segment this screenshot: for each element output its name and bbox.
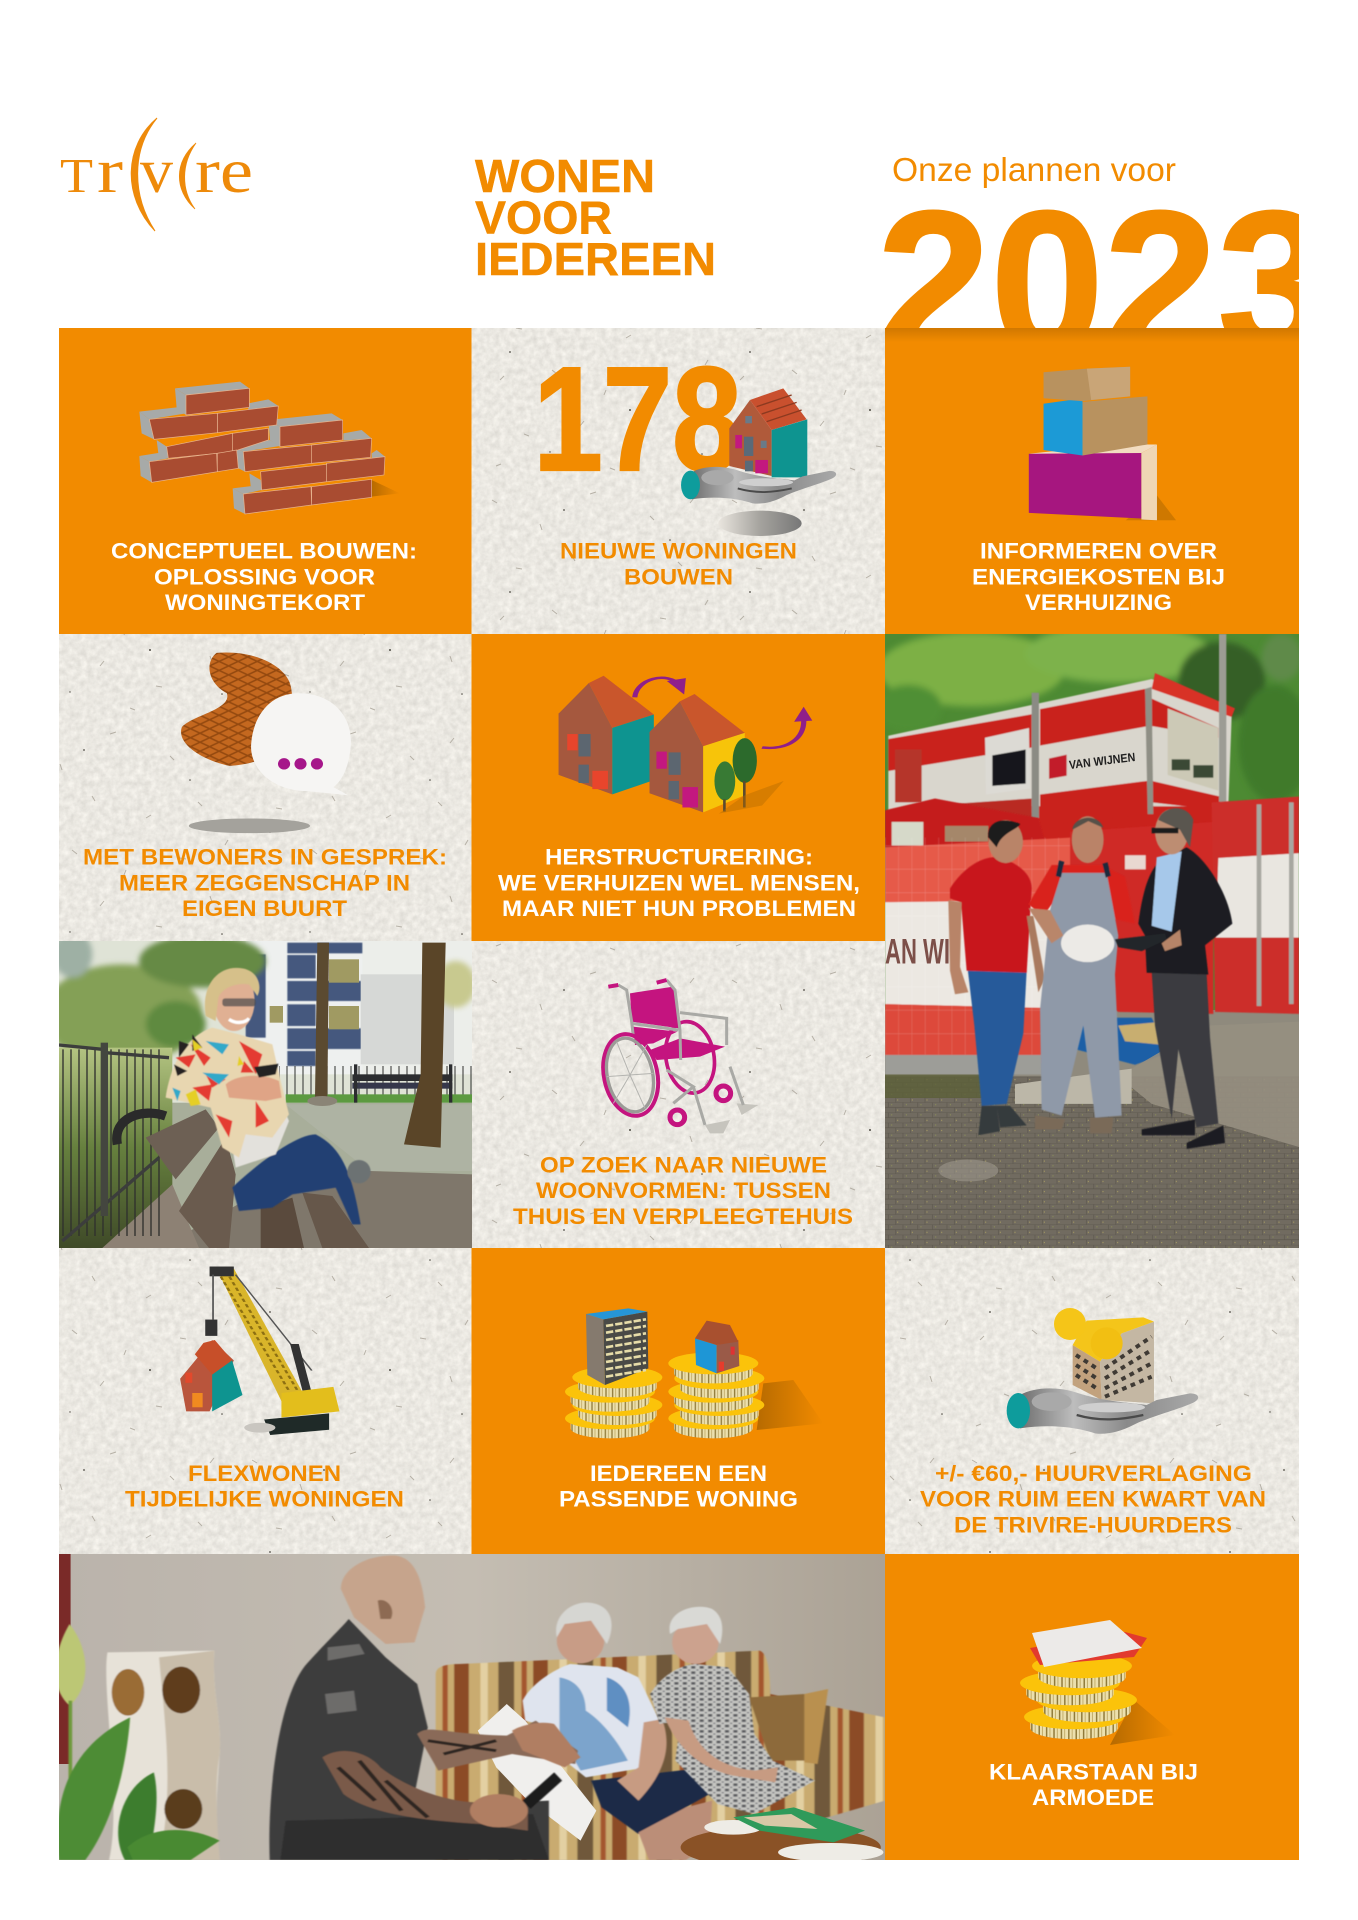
- ground: [59, 1103, 472, 1248]
- ground: [885, 1076, 1299, 1248]
- caption: flexwonen: [125, 1461, 404, 1511]
- caption: armoede: [989, 1759, 1198, 1810]
- sofa: [436, 1651, 885, 1860]
- person centre: [1028, 816, 1135, 1133]
- trees: [42, 931, 476, 1064]
- trunks: [404, 943, 446, 1148]
- caption: flexwonen: FLEXWONEN: [188, 1461, 341, 1486]
- photo: woman on park bench with phone: [59, 941, 472, 1248]
- captions: [83, 538, 1266, 1810]
- hole: [718, 511, 802, 536]
- caption: energiekosten: VERHUIZING: [1025, 590, 1172, 615]
- caption: passende woning: [559, 1461, 798, 1511]
- caption: conceptueel bouwen: [111, 538, 417, 615]
- bench: [146, 1109, 219, 1179]
- icon: crane lifting house: [180, 1267, 339, 1435]
- caption: huurverlaging: +/- €60,- HUURVERLAGING: [935, 1461, 1252, 1486]
- heading: Wonen voor iedereen: IEDEREEN: [475, 233, 716, 285]
- caption: energiekosten: ENERGIEKOSTEN BIJ: [972, 564, 1225, 589]
- caption: passende woning: PASSENDE WONING: [559, 1486, 798, 1511]
- woman: [166, 968, 371, 1224]
- fence: [59, 1048, 172, 1248]
- ground upper: [885, 1010, 1299, 1088]
- vase: [106, 1651, 220, 1860]
- icon: tower on hand with coins: [1007, 1308, 1198, 1434]
- photo: construction workers at site cabin: [885, 634, 1299, 1248]
- caption: armoede: KLAARSTAAN BIJ: [989, 1759, 1198, 1784]
- caption: met bewoners: MET BEWONERS IN GESPREK:: [83, 844, 447, 869]
- caption: energiekosten: INFORMEREN OVER: [980, 538, 1217, 563]
- hand: [681, 467, 836, 504]
- logo: Trivire: [60, 118, 253, 231]
- heading: Wonen voor iedereen: VOOR: [475, 192, 612, 244]
- pillow: [478, 1704, 596, 1841]
- table and brochure: [681, 1826, 881, 1869]
- logo: Trivire: r: [97, 135, 123, 206]
- icon: wheelchair: [596, 980, 758, 1133]
- caption: energiekosten: [972, 538, 1225, 615]
- icon: bricks: [139, 382, 400, 514]
- woman right: [650, 1607, 815, 1814]
- icon: two houses with arrows: [559, 676, 812, 814]
- icon: stroopwafel with speech bubble: [181, 652, 351, 833]
- grid of panels: [59, 328, 1299, 1860]
- caption: nieuwe woningen: [560, 538, 797, 589]
- caption: conceptueel bouwen: OPLOSSING VOOR: [154, 564, 375, 589]
- caption: flexwonen: TIJDELIJKE WONINGEN: [125, 1486, 404, 1511]
- caption: herstructurering: MAAR NIET HUN PROBLEMEN: [502, 896, 856, 921]
- logo: Trivire: v: [140, 135, 173, 206]
- person left: [948, 820, 1045, 1135]
- man: [269, 1556, 581, 1860]
- woman left: [523, 1603, 712, 1860]
- photo: caretaker talking with two elderly residents: [59, 1554, 885, 1860]
- caption: huurverlaging: VOOR RUIM EEN KWART VAN: [920, 1486, 1266, 1511]
- icon: coins with bills: [1020, 1620, 1175, 1745]
- caption: herstructurering: WE VERHUIZEN WEL MENSEN,: [498, 870, 860, 895]
- icon: moving boxes: [1029, 367, 1176, 520]
- containers: [885, 797, 1299, 1075]
- text: fence banner: AN WI: [885, 931, 950, 971]
- caption: armoede: ARMOEDE: [1032, 1785, 1154, 1810]
- caption: nieuwe woningen: NIEUWE WONINGEN: [560, 538, 797, 563]
- caption: met bewoners: EIGEN BUURT: [182, 896, 347, 921]
- subtitle: Onze plannen voor: Onze plannen voor: [892, 152, 1176, 189]
- logo: Trivire: re: [195, 135, 253, 206]
- number 178: 178: [533, 337, 742, 502]
- caption: met bewoners: MEER ZEGGENSCHAP IN: [119, 870, 410, 895]
- text: Van Wijnen sign: VAN WIJNEN: [1068, 751, 1136, 772]
- heading: Wonen voor iedereen: [475, 150, 716, 285]
- plant: [56, 1624, 220, 1860]
- caption: woonvormen: WOONVORMEN: TUSSEN: [536, 1178, 831, 1203]
- caption: huurverlaging: [920, 1461, 1266, 1537]
- caption: woonvormen: [513, 1152, 853, 1229]
- caption: conceptueel bouwen: CONCEPTUEEL BOUWEN:: [111, 538, 417, 563]
- upper cabin: [888, 634, 1235, 845]
- caption: nieuwe woningen: BOUWEN: [624, 564, 733, 589]
- icon: 178 new homes: [533, 337, 836, 536]
- far bench: [352, 1064, 452, 1103]
- heading: Wonen voor iedereen: WONEN: [475, 150, 655, 202]
- big year 2023: 2023: [877, 169, 1331, 397]
- caption: woonvormen: THUIS EN VERPLEEGTEHUIS: [513, 1204, 853, 1229]
- caption: herstructurering: [498, 844, 860, 921]
- caption: conceptueel bouwen: WONINGTEKORT: [165, 590, 365, 615]
- caption: herstructurering: HERSTRUCTURERING:: [545, 844, 813, 869]
- house: [729, 388, 807, 477]
- caption: passende woning: IEDEREEN EEN: [590, 1461, 767, 1486]
- logo: Trivire: T: [60, 148, 93, 203]
- caption: met bewoners: [83, 844, 447, 921]
- person right: [1115, 808, 1232, 1149]
- caption: woonvormen: OP ZOEK NAAR NIEUWE: [540, 1152, 827, 1177]
- caption: huurverlaging: DE TRIVIRE-HUURDERS: [954, 1512, 1232, 1537]
- icon: stacks of coins with homes: [565, 1308, 823, 1438]
